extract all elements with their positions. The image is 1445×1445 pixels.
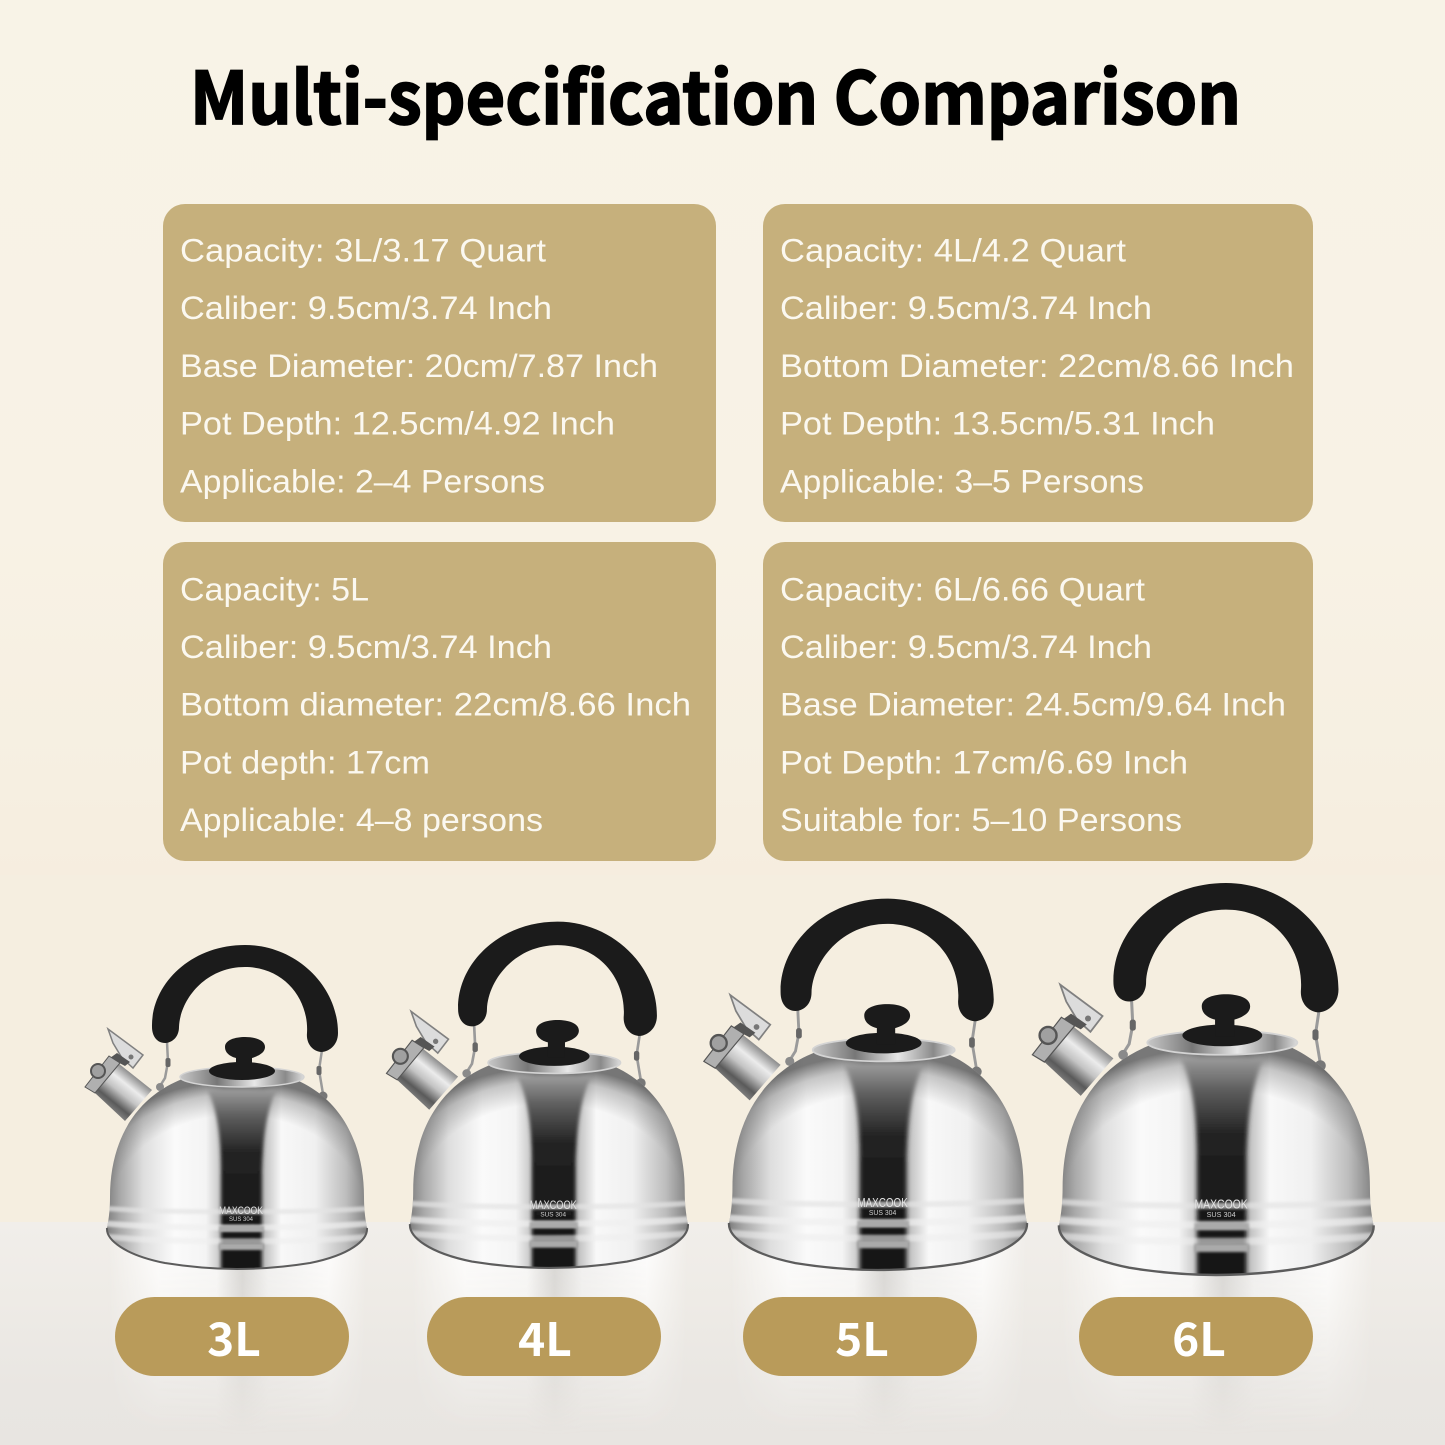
icon: 5L kettle xyxy=(704,899,1036,1277)
panel: 5L specifications: Caliber: 9.5cm/3.74 Inch xyxy=(180,629,552,665)
label pill: 6L: 6L xyxy=(1172,1304,1226,1370)
label pill: 3L xyxy=(115,1297,349,1376)
label pill: 6L xyxy=(1079,1297,1313,1376)
panel: 3L specifications: Capacity: 3L/3.17 Quart xyxy=(180,232,546,268)
icon: 4L kettle xyxy=(386,922,696,1274)
icon: 3L kettle: MAXCOOK xyxy=(219,1205,264,1217)
background xyxy=(0,1242,1445,1445)
panel: 4L specifications: Applicable: 3–5 Persons xyxy=(780,464,1144,500)
panel: 4L specifications: Pot Depth: 13.5cm/5.31 Inch xyxy=(780,406,1215,442)
panel: 4L specifications xyxy=(763,204,1313,522)
panel: 4L specifications: Caliber: 9.5cm/3.74 Inch xyxy=(780,290,1152,326)
panel: 6L specifications: Base Diameter: 24.5cm/9.64 Inch xyxy=(780,686,1286,722)
panel: 5L specifications: Bottom diameter: 22cm/8.66 Inch xyxy=(180,686,691,722)
panel: 6L specifications: Suitable for: 5–10 Persons xyxy=(780,802,1182,838)
panel: 3L specifications: Pot Depth: 12.5cm/4.92 Inch xyxy=(180,406,615,442)
icon: 6L kettle: SUS 304 xyxy=(1207,1210,1236,1219)
title: Multi-specification Comparison xyxy=(190,40,1241,145)
label pill: 5L: 5L xyxy=(835,1304,889,1370)
panel: 6L specifications: Capacity: 6L/6.66 Quart xyxy=(780,572,1145,608)
icon: 3L kettle xyxy=(85,945,375,1275)
icon: 4L kettle: MAXCOOK xyxy=(530,1199,577,1212)
icon: 6L kettle xyxy=(1032,883,1383,1282)
panel: 6L specifications: Pot Depth: 17cm/6.69 Inch xyxy=(780,744,1188,780)
panel: 3L specifications: Applicable: 2–4 Persons xyxy=(180,464,545,500)
label pill: 4L xyxy=(427,1297,661,1376)
panel: 5L specifications: Applicable: 4–8 persons xyxy=(180,802,543,838)
panel: 5L specifications: Capacity: 5L xyxy=(180,572,369,608)
panel: 5L specifications: Pot depth: 17cm xyxy=(180,744,430,780)
panel: 4L specifications: Capacity: 4L/4.2 Quart xyxy=(780,232,1126,268)
panel: 6L specifications xyxy=(763,542,1313,861)
icon: 4L kettle: SUS 304 xyxy=(540,1212,566,1219)
label pill: 5L xyxy=(743,1297,977,1376)
icon: 5L kettle: MAXCOOK xyxy=(857,1196,908,1210)
icon: 5L kettle: SUS 304 xyxy=(869,1210,896,1217)
panel: 3L specifications: Caliber: 9.5cm/3.74 Inch xyxy=(180,290,552,326)
panel: 3L specifications xyxy=(163,204,716,522)
panel: 3L specifications: Base Diameter: 20cm/7.87 Inch xyxy=(180,348,658,384)
icon: 3L kettle: SUS 304 xyxy=(229,1217,254,1223)
panel: 4L specifications: Bottom Diameter: 22cm/8.66 Inch xyxy=(780,348,1294,384)
label pill: 3L: 3L xyxy=(207,1304,261,1370)
icon: 6L kettle: MAXCOOK xyxy=(1194,1196,1248,1211)
label pill: 4L: 4L xyxy=(518,1304,572,1370)
panel: 5L specifications xyxy=(163,542,716,861)
panel: 6L specifications: Caliber: 9.5cm/3.74 Inch xyxy=(780,629,1152,665)
